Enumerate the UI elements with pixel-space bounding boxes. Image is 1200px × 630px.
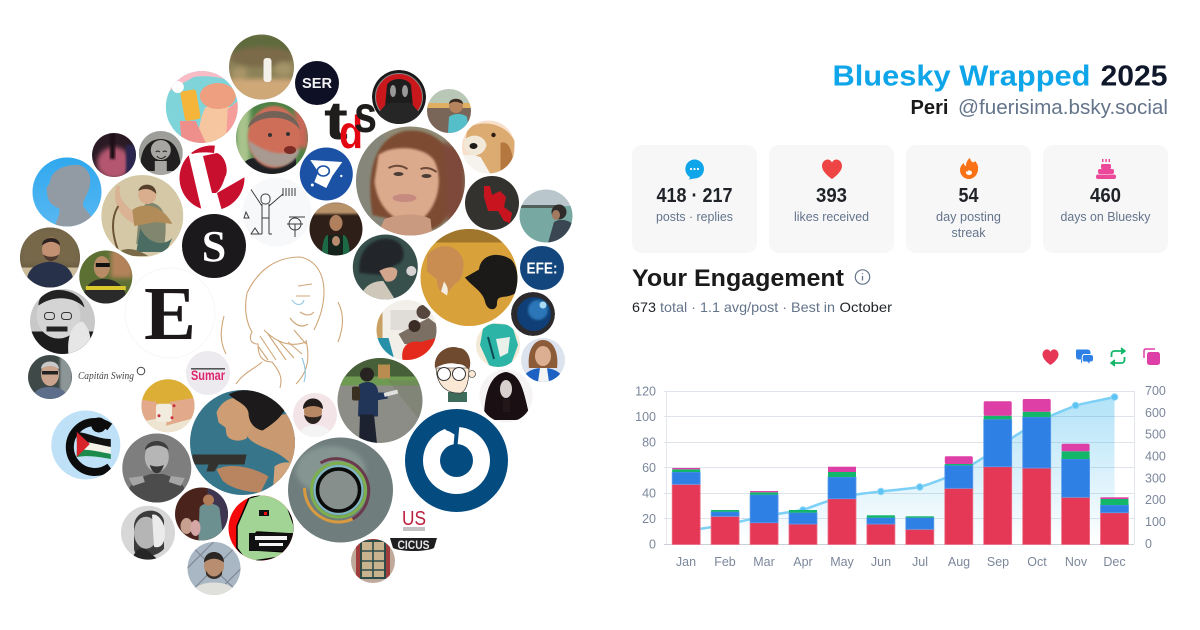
avatar: man looking over lake (519, 189, 573, 243)
avatar: smiling young man on pink (293, 393, 337, 437)
panel: likes received stat: likes received (794, 210, 869, 224)
y axis left: 40 (642, 486, 656, 500)
cumulative area (686, 397, 1114, 544)
panel: days on Bluesky stat (1043, 145, 1168, 253)
chart: monthly engagement stacked bars with cumulative line (635, 384, 1166, 569)
avatar: red P logo (180, 146, 244, 209)
panel: posts and replies stat: posts · replies (656, 210, 733, 224)
panel: posts and replies stat: 418 · 217 (656, 185, 732, 207)
title: Bluesky Wrapped (832, 60, 1090, 92)
y axis left: 80 (642, 436, 656, 450)
y axis right: 400 (1145, 450, 1166, 464)
avatar: EFE logo (520, 246, 564, 290)
y axis left: 100 (635, 410, 656, 424)
avatar: cartoon boy with glasses (435, 347, 476, 402)
avatar: woman in blue blazer (521, 338, 565, 382)
avatar: grey silhouette on blue (32, 157, 102, 227)
y axis right: 600 (1145, 406, 1166, 420)
x axis labels: May (830, 555, 855, 569)
avatar: officer portrait grey (122, 433, 192, 503)
icon: info (855, 270, 870, 284)
icon: heart (822, 160, 842, 179)
avatar: main woman portrait (356, 126, 466, 237)
icon: chat bubble (685, 160, 704, 180)
engagement summary: October (840, 299, 892, 315)
x axis labels (676, 555, 1126, 569)
x axis labels: Mar (753, 555, 775, 569)
logo: tds letters (324, 86, 377, 158)
avatar: curly-haired painting (352, 234, 418, 300)
avatar: smiling curly girl drawing (139, 131, 183, 175)
avatar: man covering eye with hand (121, 506, 175, 560)
legend (1042, 348, 1160, 366)
panel: likes received stat: 393 (816, 185, 847, 207)
avatar: black figure with red gorilla (465, 176, 519, 230)
avatar: S logo: S (202, 222, 226, 271)
avatar: hands holding yellow cup (141, 379, 195, 434)
avatar: man and child with toy gun (376, 300, 436, 360)
avatar: classical archer painting (101, 175, 183, 257)
panel: posting streak stat: 54 (958, 185, 979, 207)
avatar: EFE logo: EFE: (526, 260, 558, 278)
avatar: stick figure drawing (243, 188, 305, 237)
avatar: red gas mask emblem (372, 70, 426, 124)
x axis labels: Jun (871, 555, 891, 569)
avatar: E logo: E (144, 272, 196, 356)
author name and handle: @fuerisima.bsky.social (958, 97, 1168, 119)
logo: tds letters: s (354, 86, 377, 144)
x axis labels: Feb (714, 555, 736, 569)
avatar: Groucho Marx (30, 288, 96, 356)
avatar: woman on rocky landscape (228, 34, 294, 103)
x axis labels: Apr (793, 555, 813, 569)
y axis right: 0 (1145, 537, 1152, 551)
panel: avatar circle pack (20, 34, 573, 596)
icon: quotes legend squares (1144, 349, 1160, 365)
icon: reposts legend arrows (1111, 348, 1125, 366)
y axis left: 60 (642, 461, 656, 475)
avatar: dark pink abstract portrait (92, 133, 136, 179)
avatar: E logo (125, 268, 215, 358)
avatar: SER logo (295, 61, 339, 105)
avatar: young man with lattice background (187, 542, 241, 596)
avatar: otter with phone (166, 71, 238, 143)
avatar: pixel green dinosaur (228, 492, 294, 562)
avatar: SER logo: SER (302, 75, 332, 92)
avatar: man in teal tank top at sea (427, 89, 471, 133)
panel: likes received stat (769, 145, 894, 253)
x axis labels: Jul (912, 555, 928, 569)
bars: reposts (672, 412, 1128, 518)
panel: posting streak stat: streak (952, 226, 986, 240)
panel: posting streak stat (906, 145, 1031, 253)
avatar: long black hair portrait (479, 369, 533, 423)
logo: Universidad de Sevilla and CICUS (390, 508, 437, 552)
y axis left (635, 384, 656, 552)
x axis labels: Sep (987, 555, 1009, 569)
line points (800, 394, 1118, 513)
avatar: man reading on cobblestones (337, 358, 423, 444)
avatar: navy ring logo (405, 409, 508, 512)
logo: Universidad de Sevilla and CICUS: CICUS (398, 540, 430, 552)
avatar: Sumar logo (186, 351, 230, 395)
logo: tds letters: d (339, 106, 363, 158)
avatar: clapping man with glasses (309, 202, 363, 256)
y axis left: 20 (642, 512, 656, 526)
bars: quotes (672, 399, 1128, 499)
y axis right (1145, 384, 1166, 551)
bars: replies (672, 417, 1128, 529)
y axis right: 500 (1145, 428, 1166, 442)
icon: replies legend chat (1076, 350, 1094, 365)
heading: Your Engagement: Your Engagement (632, 265, 844, 292)
y axis right: 100 (1145, 515, 1166, 529)
logo: Capitán Swing: Capitán Swing (78, 370, 134, 382)
avatar: blue sphere (511, 292, 555, 336)
logo: tds letters: t (324, 91, 348, 151)
avatar: golden retriever (462, 120, 516, 175)
x axis labels: Jan (676, 555, 696, 569)
avatar: man with sunglasses (79, 250, 133, 304)
avatar: Mercury mandala rings (288, 437, 394, 543)
author name and handle: Peri (910, 97, 948, 119)
avatar: grey-haired man with glasses (28, 355, 72, 399)
avatar: blue Spain map logo (300, 148, 353, 200)
x axis labels: Oct (1027, 555, 1047, 569)
avatar: man in green tunic (174, 487, 228, 541)
panel: days on Bluesky stat: 460 (1090, 185, 1121, 207)
avatar: Woman with gun painting (190, 390, 296, 496)
icon: likes legend heart (1042, 349, 1058, 365)
engagement summary: total · 1.1 avg/post · Best in (660, 299, 835, 315)
x axis labels: Dec (1103, 555, 1126, 569)
title: 2025 (1100, 60, 1168, 92)
avatar: S logo (182, 214, 246, 278)
avatar: bald man with beard (236, 102, 308, 174)
x axis labels: Nov (1065, 555, 1088, 569)
y axis left: 120 (635, 384, 656, 398)
y axis right: 200 (1145, 493, 1166, 507)
cumulative line (686, 397, 1114, 531)
avatar: Palestine flag C (51, 410, 121, 480)
icon: birthday cake (1096, 159, 1116, 179)
y axis right: 700 (1145, 384, 1166, 398)
avatar: two dogs on yellow bed (420, 228, 518, 326)
avatar: man in navy shirt (20, 228, 80, 288)
icon: flame (960, 158, 978, 179)
y axis right: 300 (1145, 472, 1166, 486)
avatar: Sumar logo: Sumar (191, 367, 225, 383)
y axis left: 0 (649, 538, 656, 552)
avatar: sepia sketch portrait (220, 254, 356, 390)
x axis labels: Aug (948, 555, 970, 569)
engagement summary (632, 299, 892, 315)
avatar: teal cartoon character (476, 323, 520, 367)
panel: posting streak stat: day posting (936, 210, 1001, 224)
engagement summary: 673 (632, 299, 656, 315)
panel: days on Bluesky stat: days on Bluesky (1060, 210, 1151, 224)
avatar: window with red shutters (351, 539, 395, 583)
logo: Universidad de Sevilla and CICUS: US (402, 508, 426, 530)
bars: likes (672, 467, 1128, 544)
panel: posts and replies stat (632, 145, 757, 253)
